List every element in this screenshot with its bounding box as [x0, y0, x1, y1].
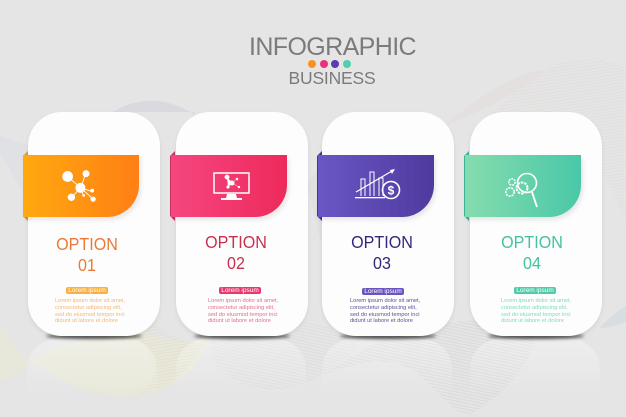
icon: molecule network — [62, 170, 96, 202]
body text: didunt ut labore et dolore — [208, 318, 271, 324]
body text: sed do eiusmod tempor inci — [501, 312, 571, 318]
ribbon — [23, 155, 139, 217]
reflection: cards — [38, 339, 580, 366]
icon: monitor — [213, 172, 250, 200]
option heading — [501, 232, 563, 273]
option heading: OPTION — [56, 234, 118, 254]
option heading: 03 — [373, 253, 391, 273]
body text: Lorem ipsum dolor sit amet, — [55, 298, 125, 304]
option heading: 02 — [227, 253, 245, 273]
icon: chart and dollar coin — [355, 169, 400, 200]
body text: Lorem ipsum dolor sit amet, — [208, 298, 278, 304]
option heading — [351, 232, 413, 273]
panel: option 03 — [317, 112, 454, 342]
title: INFOGRAPHIC — [249, 33, 416, 61]
body text: consectetur adipiscing elit, — [501, 305, 568, 311]
tag: Lorem ipsum — [68, 287, 106, 294]
body text — [350, 298, 420, 324]
option heading: 01 — [78, 255, 96, 275]
body text: Lorem ipsum dolor sit amet, — [501, 298, 571, 304]
body text — [55, 298, 125, 324]
body text: sed do eiusmod tempor inci — [350, 312, 420, 318]
body text: sed do eiusmod tempor inci — [55, 312, 125, 318]
body text: didunt ut labore et dolore — [55, 318, 118, 324]
body text: didunt ut labore et dolore — [501, 318, 564, 324]
body text: consectetur adipiscing elit, — [55, 305, 122, 311]
ribbon — [318, 155, 434, 217]
icon: gears and magnifier — [505, 172, 538, 208]
panel: option 04 — [464, 112, 602, 342]
option heading — [56, 234, 118, 275]
ribbon — [171, 155, 287, 217]
option heading: OPTION — [501, 232, 563, 252]
ribbon fold — [24, 151, 28, 221]
body text: didunt ut labore et dolore — [350, 318, 413, 324]
option heading — [205, 232, 267, 273]
body text: consectetur adipiscing elit, — [208, 305, 275, 311]
panel: option 01 — [23, 112, 160, 342]
option heading: 04 — [523, 253, 541, 273]
option heading: OPTION — [351, 232, 413, 252]
ribbon fold — [170, 151, 175, 221]
tag: Lorem ipsum — [221, 287, 259, 294]
body text: Lorem ipsum dolor sit amet, — [350, 298, 420, 304]
ribbon — [465, 155, 581, 217]
body text: sed do eiusmod tempor inci — [208, 312, 278, 318]
subtitle: BUSINESS — [289, 68, 375, 88]
tag: Lorem ipsum — [364, 288, 402, 295]
title dots — [308, 60, 351, 68]
ribbon fold — [464, 151, 469, 221]
body text: consectetur adipiscing elit, — [350, 305, 417, 311]
tag: Lorem ipsum — [516, 287, 554, 294]
panel: option 02 — [170, 112, 308, 342]
body text — [208, 298, 278, 324]
icon: chart and dollar coin: $ — [388, 184, 395, 198]
ribbon fold — [317, 151, 322, 221]
option heading: OPTION — [205, 232, 267, 252]
body text — [501, 298, 571, 324]
